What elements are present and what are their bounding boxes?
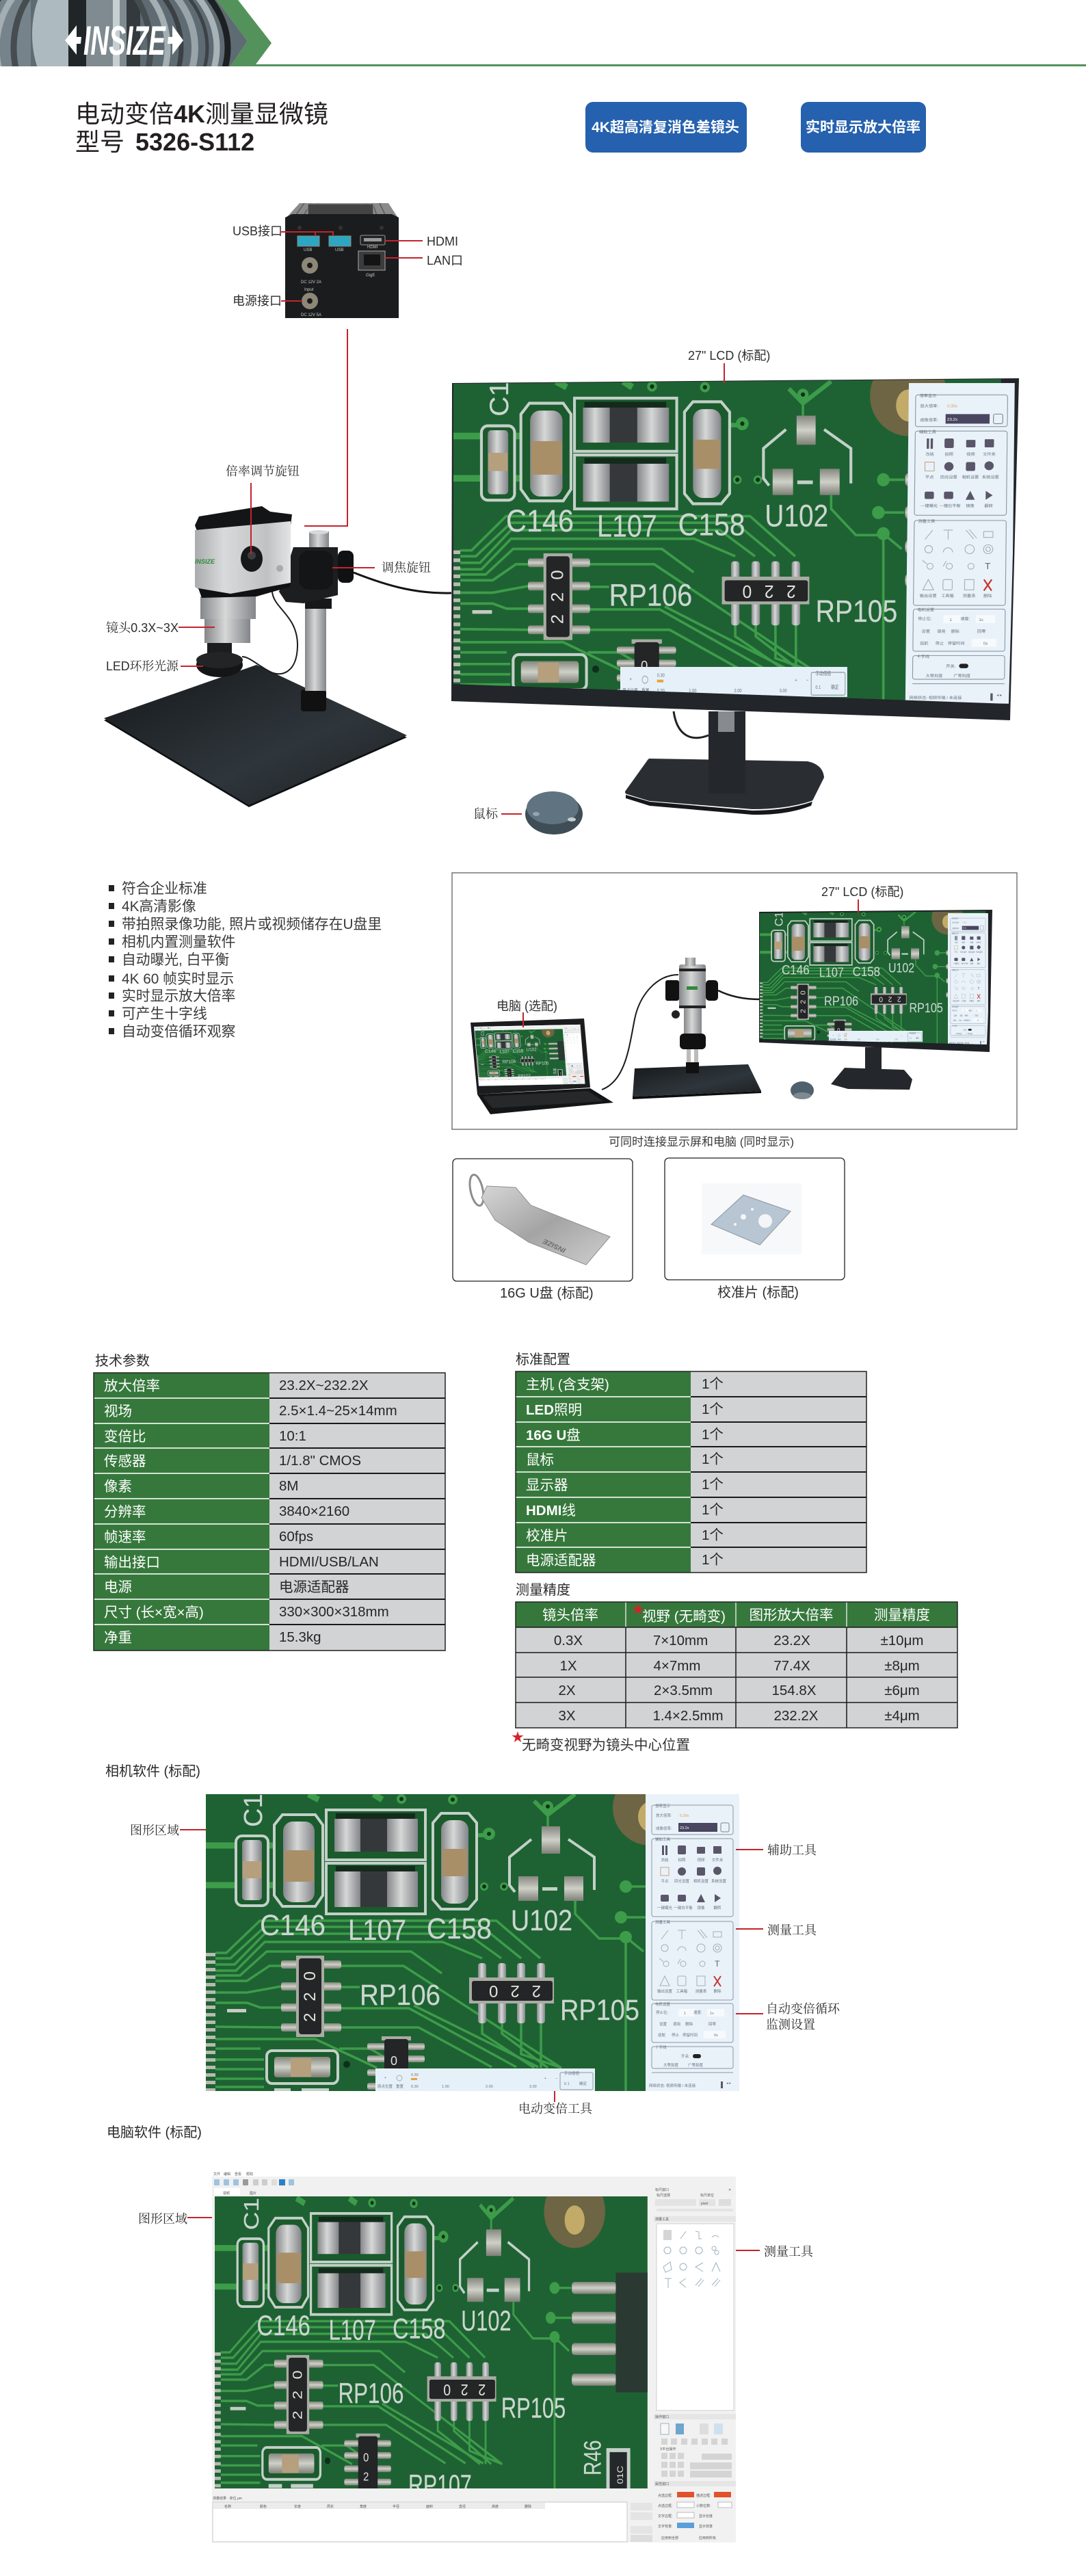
camera rear panel with connector labels: USB	[335, 248, 343, 252]
table: measurement accuracy: 图形放大倍率	[750, 1607, 833, 1623]
panel: USB drive: INSIZE	[542, 1237, 567, 1254]
table: specifications: 15.3kg	[279, 1629, 321, 1645]
table: specifications: 像素	[104, 1479, 132, 1495]
camera head	[195, 506, 292, 598]
feature list: 实时显示放大倍率	[122, 988, 235, 1004]
connector leader line	[304, 329, 347, 526]
table: specifications: 尺寸 (长×宽×高)	[104, 1605, 204, 1620]
badge: 4K lens	[585, 102, 747, 153]
table: specifications: 传感器	[104, 1454, 146, 1469]
heading: camera software: 相机软件 (标配)	[105, 1763, 200, 1779]
label: lens range: 镜头0.3X~3X	[106, 621, 178, 635]
footnote: distortion-free field	[512, 1731, 690, 1753]
table: measurement accuracy: 3X	[558, 1708, 576, 1724]
table: standard configuration	[516, 1371, 866, 1573]
footnote: distortion-free field: 无畸变视野为镜头中心位置	[522, 1737, 690, 1753]
table: specifications: 电源适配器	[279, 1579, 349, 1595]
table: measurement accuracy: ±10μm	[881, 1633, 923, 1648]
table: specifications: 放大倍率	[104, 1378, 160, 1394]
table: standard configuration: 1个	[702, 1477, 724, 1493]
header banner	[0, 0, 1086, 66]
small microscope	[633, 958, 761, 1099]
table: standard configuration: 鼠标	[526, 1452, 554, 1468]
table: measurement accuracy: ★	[632, 1603, 644, 1616]
label: HDMI	[385, 235, 458, 248]
label: small LCD	[821, 885, 903, 913]
label: LAN: LAN口	[427, 254, 463, 267]
table: specifications: 10:1	[279, 1428, 306, 1444]
label: PC graphics area	[138, 2212, 212, 2226]
27 inch LCD monitor	[447, 349, 1019, 815]
table: specifications: 电源	[104, 1579, 132, 1595]
heading: measurement accuracy: 测量精度	[516, 1582, 570, 1598]
heading: PC software: 电脑软件 (标配)	[107, 2125, 202, 2140]
side tool panel	[646, 1794, 739, 2091]
title: 型号	[75, 128, 124, 156]
table: specifications: 帧速率	[104, 1529, 146, 1545]
panel: connection diagram	[452, 873, 1017, 1129]
INSIZE logo	[65, 18, 183, 64]
label: small LCD: 27" LCD (标配)	[821, 885, 903, 899]
label: LCD: 27" LCD (标配)	[688, 349, 770, 363]
table: measurement accuracy	[516, 1602, 957, 1728]
table: standard configuration: 1个	[702, 1427, 724, 1443]
table: measurement accuracy: 4×7mm	[654, 1658, 700, 1674]
table: specifications: 视场	[104, 1404, 132, 1419]
table: measurement accuracy: 232.2X	[774, 1708, 819, 1724]
label: PC: 电脑 (选配)	[496, 999, 557, 1013]
label: auxiliary tools: 辅助工具	[767, 1843, 817, 1857]
table: standard configuration: 1个	[702, 1552, 724, 1568]
badge: live magnification: 实时显示放大倍率	[806, 119, 921, 135]
camera rear panel with connector labels: Input	[304, 288, 314, 292]
label: PC graphics area: 图形区域	[138, 2212, 187, 2226]
PC software screenshot	[211, 2172, 736, 2542]
label: LED ring light: LED环形光源	[106, 659, 179, 673]
feature list: 4K高清影像	[122, 899, 196, 915]
feature list: 自动变倍循环观察	[122, 1024, 236, 1040]
label: magnification knob	[226, 464, 300, 554]
focus mount and knobs	[279, 547, 354, 603]
badge: 4K lens: 4K超高清复消色差镜头	[592, 119, 739, 135]
camera rear panel with connector labels	[233, 203, 463, 318]
camera rear panel with connector labels: USB	[304, 248, 312, 252]
label: USB drive: 16G U盘 (标配)	[500, 1285, 594, 1301]
badge: live magnification	[801, 102, 926, 153]
laptop	[471, 1018, 613, 1114]
feature list: 自动曝光, 白平衡	[122, 952, 229, 968]
LED ring light	[196, 652, 243, 677]
label: LCD	[688, 349, 770, 383]
monitor screen image	[447, 356, 1015, 713]
panel: calibration slide	[665, 1158, 845, 1280]
label: auto zoom cycle settings: 监测设置	[766, 2018, 815, 2032]
feature list: 相机内置测量软件	[122, 934, 235, 950]
table: measurement accuracy: 1X	[559, 1658, 577, 1674]
camera rear panel with connector labels: HDMI	[367, 246, 378, 250]
table: specifications: HDMI/USB/LAN	[279, 1554, 379, 1570]
mouse with label	[473, 791, 583, 834]
microscope base plate	[104, 665, 407, 807]
table: measurement accuracy: 镜头倍率	[542, 1607, 598, 1623]
label: graphics area	[130, 1824, 206, 1837]
label: auxiliary tools	[736, 1843, 817, 1857]
feature list: 可产生十字线	[122, 1006, 207, 1022]
panel: USB drive	[453, 1159, 633, 1281]
label: power port: 电源接口	[233, 294, 282, 308]
table: measurement accuracy: 154.8X	[772, 1683, 817, 1698]
small mouse	[791, 1081, 814, 1099]
table: measurement accuracy: ±8μm	[884, 1658, 920, 1674]
table: specifications: 1/1.8" CMOS	[279, 1453, 361, 1469]
table: specifications: 变倍比	[104, 1429, 146, 1445]
table: standard configuration: 16G U盘	[526, 1428, 581, 1443]
label: measuring tools	[736, 1923, 817, 1937]
table: measurement accuracy: 2×3.5mm	[654, 1683, 713, 1698]
table: measurement accuracy: 0.3X	[554, 1633, 583, 1648]
heading: specifications: 技术参数	[95, 1353, 150, 1369]
label: HDMI: HDMI	[427, 235, 458, 248]
table: measurement accuracy: 2X	[558, 1683, 576, 1698]
small monitor	[758, 901, 992, 1090]
table: measurement accuracy: 77.4X	[773, 1658, 810, 1674]
table: measurement accuracy: 23.2X	[773, 1633, 810, 1648]
label: USB port: USB接口	[233, 224, 282, 238]
feature list: 4K 60 帧实时显示	[122, 971, 234, 987]
cable to laptop	[602, 975, 678, 1090]
table: specifications: 3840×2160	[279, 1503, 349, 1519]
label: calibration slide: 校准片 (标配)	[717, 1285, 799, 1300]
INSIZE logo: INSIZE	[83, 18, 166, 64]
camera head: INSIZE	[195, 558, 215, 565]
title: 电动变倍4K测量显微镜	[75, 100, 328, 128]
camera rear panel with connector labels: DC 12V 2A	[301, 280, 321, 285]
label: auto zoom cycle settings	[736, 2002, 840, 2032]
caption: connection diagram: 可同时连接显示屏和电脑 (同时显示)	[609, 1135, 794, 1148]
label: magnification knob: 倍率调节旋钮	[226, 464, 300, 478]
table: measurement accuracy: 1.4×2.5mm	[652, 1708, 724, 1724]
table: standard configuration: 主机 (含支架)	[526, 1377, 609, 1393]
table: specifications: 2.5×1.4~25×14mm	[279, 1403, 397, 1419]
zoom tool bar	[375, 2068, 595, 2091]
label: USB port	[233, 224, 333, 238]
feature list	[109, 881, 382, 1040]
table: specifications	[94, 1373, 445, 1651]
table: specifications: 分辨率	[104, 1504, 146, 1520]
header green chevron	[217, 0, 1086, 66]
table: specifications: 330×300×318mm	[279, 1604, 389, 1620]
mouse with label: 鼠标	[473, 807, 499, 821]
table: standard configuration: 电源适配器	[526, 1553, 596, 1568]
table: standard configuration: HDMI线	[526, 1503, 576, 1519]
label: LAN	[385, 254, 463, 267]
table: measurement accuracy: 视野 (无畸变)	[642, 1609, 726, 1625]
table: specifications: 输出接口	[104, 1555, 160, 1570]
monitor stand	[626, 711, 822, 815]
table: measurement accuracy: 测量精度	[874, 1607, 930, 1623]
table: standard configuration: 校准片	[526, 1528, 568, 1544]
table: standard configuration: 1个	[702, 1402, 724, 1417]
title	[75, 100, 328, 156]
title: 5326-S112	[135, 128, 254, 156]
camera rear panel with connector labels: GigE	[366, 274, 375, 278]
feature list: 带拍照录像功能, 照片或视频储存在U盘里	[122, 917, 382, 932]
table: measurement accuracy: ±6μm	[884, 1683, 920, 1698]
table: standard configuration: 1个	[702, 1451, 724, 1467]
footnote: distortion-free field: ★	[512, 1731, 524, 1744]
column post	[301, 530, 332, 711]
label: graphics area: 图形区域	[130, 1824, 179, 1837]
cable to monitor	[718, 990, 760, 999]
microscope main photo	[104, 464, 451, 807]
table: specifications: 净重	[104, 1630, 132, 1646]
table: measurement accuracy: ±4μm	[884, 1708, 920, 1724]
heading: standard configuration: 标准配置	[516, 1352, 570, 1367]
table: standard configuration: 1个	[702, 1502, 724, 1518]
table: standard configuration: LED照明	[526, 1402, 582, 1418]
label: measuring tools: 测量工具	[767, 1923, 817, 1937]
video cable	[354, 573, 451, 593]
table: specifications: 23.2X~232.2X	[279, 1378, 369, 1393]
label: auto zoom cycle settings: 自动变倍循环	[766, 2002, 840, 2016]
lens	[200, 596, 256, 654]
label: focus knob: 调焦旋钮	[382, 561, 431, 575]
camera software screenshot	[206, 1794, 739, 2091]
label: PC	[496, 999, 557, 1027]
label: PC measuring tools: 测量工具	[764, 2245, 814, 2259]
power cable	[242, 592, 297, 674]
feature list: 符合企业标准	[122, 881, 207, 897]
table: specifications: 8M	[279, 1478, 298, 1494]
table: standard configuration: 显示器	[526, 1477, 568, 1493]
header gear photo	[0, 0, 248, 66]
label: motorized zoom tool: 电动变倍工具	[518, 2102, 593, 2116]
table: standard configuration: 1个	[702, 1376, 724, 1392]
table: standard configuration: 1个	[702, 1527, 724, 1543]
table: specifications: 60fps	[279, 1529, 313, 1545]
label: motorized zoom tool	[518, 2091, 593, 2116]
table: measurement accuracy: 7×10mm	[653, 1633, 708, 1648]
label: PC measuring tools	[736, 2245, 814, 2259]
camera rear panel with connector labels: DC 12V 5A	[301, 313, 321, 317]
monitor bezel	[451, 378, 1019, 720]
